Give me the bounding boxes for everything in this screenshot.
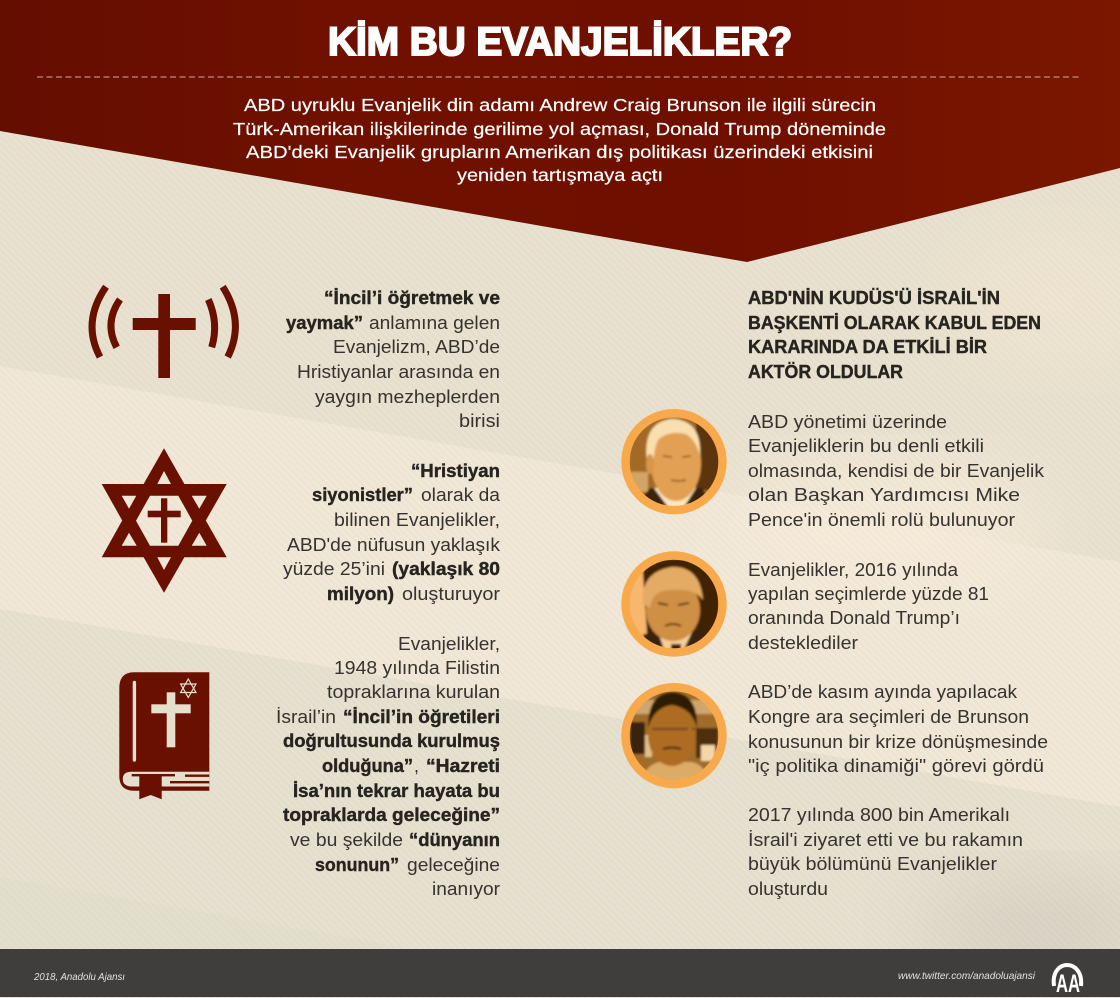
text: Israel visitors: İsrail'i ziyaret etti ve bu rakamın [748,830,1023,850]
text: beliefs about Israel: sonunun” [315,855,399,875]
icon: star of David with cross [102,448,227,593]
text: Brunson [748,682,1048,776]
text: beliefs about Israel: Evanjelikler, [398,634,500,654]
footer twitter link: www.twitter.com/anadoluajansi [898,970,1036,982]
heading: right column: ABD'NİN KUDÜS'Ü İSRAİL'İN [748,288,1000,308]
text: beliefs about Israel: “Hazreti [426,756,500,776]
text: beliefs about Israel: , [414,756,419,776]
heading: right column: AKTÖR OLDULAR [748,362,903,382]
text: christian zionists: yüzde 25’ini [283,559,385,579]
text: beliefs about Israel: İsrail’in [276,707,336,727]
text: Brunson: konusunun bir krize dönüşmesinde [748,732,1048,752]
text: Pence: ABD yönetimi üzerinde [748,412,947,432]
text: beliefs about Israel [276,634,500,899]
icon: broadcasting cross [92,287,235,378]
text: Israel visitors [748,805,1023,899]
intro text [233,95,886,185]
text: beliefs about Israel: topraklarına kurulan [327,682,500,702]
text: Pence: Evanjeliklerin bu denli etkili [748,436,984,456]
footer [0,949,1120,998]
text: christian zionists: (yaklaşık 80 [392,559,500,579]
text: Brunson: Kongre ara seçimleri de Brunson [748,707,1029,727]
text: evangelism: yaymak” [286,313,363,333]
text: christian zionists: milyon) [327,584,394,604]
text: christian zionists: oluşturuyor [402,584,500,604]
text: evangelism [286,288,500,431]
text: christian zionists: olarak da [421,485,501,505]
intro text: yeniden tartışmaya açtı [457,165,663,185]
text: christian zionists: ABD'de nüfusun yaklaşık [287,535,501,555]
text: evangelism: “İncil’i öğretmek ve [324,288,500,308]
text: evangelism: birisi [459,411,500,431]
text: Trump [748,560,989,653]
icon: AA logo [1054,965,1081,998]
text: beliefs about Israel: olduğuna” [322,756,413,776]
text: christian zionists: bilinen Evanjelikler, [334,510,500,530]
text: Israel visitors: büyük bölümünü Evanjelikler [748,854,997,874]
text: beliefs about Israel: 1948 yılında Filistin [334,658,500,678]
text: beliefs about Israel: ve bu şekilde [290,830,403,850]
header banner [0,0,1120,262]
icon: AA logo: AA [1056,970,1080,998]
heading: right column: KARARINDA DA ETKİLİ BİR [748,337,987,357]
intro text: Türk-Amerikan ilişkilerinde gerilime yol açması, Donald Trump döneminde [233,119,886,139]
text: beliefs about Israel: inanıyor [432,879,500,899]
intro text: ABD uyruklu Evanjelik din adamı Andrew Craig Brunson ile ilgili sürecin [244,95,876,115]
footer credit: 2018, Anadolu Ajansı [33,971,125,983]
text: christian zionists: “Hristiyan [411,461,500,481]
text: christian zionists [283,461,501,604]
text: beliefs about Israel: doğrultusunda kurulmuş [283,731,500,751]
text: beliefs about Israel: geleceğine [407,855,500,875]
heading: right column: BAŞKENTİ OLARAK KABUL EDEN [748,313,1041,333]
text: beliefs about Israel: İsa’nın tekrar hayata bu [293,781,500,801]
text: Brunson: "iç politika dinamiği" görevi gördü [748,756,1044,776]
text: evangelism: Hristiyanlar arasında en [297,362,500,382]
text: Pence: Pence'in önemli rolü bulunuyor [748,510,1015,530]
text: beliefs about Israel: topraklarda geleceğine” [283,805,500,825]
intro text: ABD'deki Evanjelik grupların Amerikan dış politikası üzerindeki etkisini [246,142,873,162]
text: Brunson: ABD’de kasım ayında yapılacak [748,682,1018,702]
portrait: Donald Trump [621,551,727,657]
text: Trump: yapılan seçimlerde yüzde 81 [748,584,989,604]
icon: bible [119,672,209,799]
text: Pence: olmasında, kendisi de bir Evanjelik [748,461,1045,481]
text: Trump: oranında Donald Trump’ı [748,608,960,628]
text: Pence [748,412,1045,530]
text: evangelism: anlamına gelen [369,313,500,333]
dashed divider [37,76,1081,78]
title: KİM BU EVANJELİKLER? [328,20,792,64]
text: Pence: olan Başkan Yardımcısı Mike [748,485,1020,505]
heading: right column [748,288,1041,382]
text: Israel visitors: 2017 yılında 800 bin Amerikalı [748,805,1010,825]
text: christian zionists: siyonistler” [312,485,413,505]
portrait: Mike Pence [621,409,727,514]
text: evangelism: yaygın mezheplerden [315,387,500,407]
text: Trump: Evanjelikler, 2016 yılında [748,560,959,580]
text: evangelism: Evanjelizm, ABD’de [333,337,500,357]
text: Israel visitors: oluşturdu [748,879,828,899]
text: beliefs about Israel: “dünyanın [409,830,500,850]
portrait: Andrew Brunson [621,683,727,788]
text: Trump: desteklediler [748,633,858,653]
text: beliefs about Israel: “İncil’in öğretileri [343,707,500,727]
